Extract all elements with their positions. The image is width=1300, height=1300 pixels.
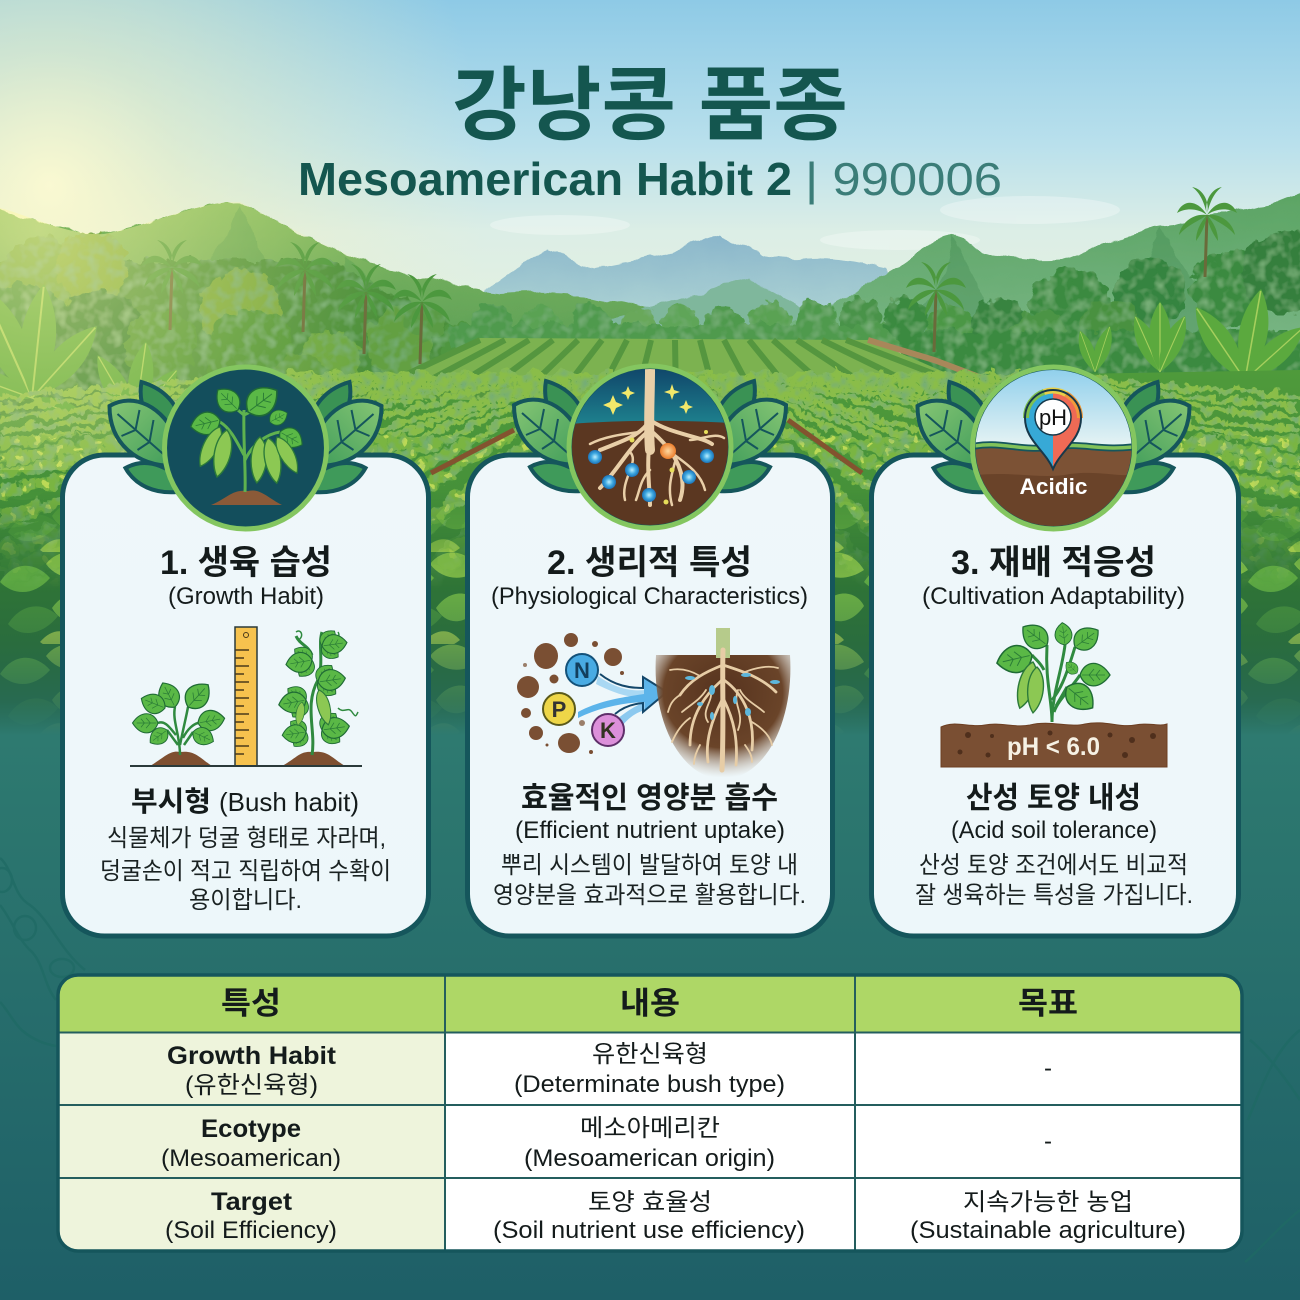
background: right trees xyxy=(883,230,1300,389)
big foreground leaves xyxy=(0,496,1300,726)
medallion: roots in soil xyxy=(514,366,786,530)
subheading: (Cultivation Adaptability) xyxy=(922,583,1185,610)
row: growth habit: (Determinate bush type) xyxy=(514,1071,785,1098)
background: palms xyxy=(142,187,1237,364)
right green mountain xyxy=(735,190,1300,345)
summary table xyxy=(58,975,1242,1252)
row: target: (Soil nutrient use efficiency) xyxy=(493,1217,805,1244)
subtitle: accession number: | 990006 xyxy=(805,153,1002,205)
row: ecotype: - xyxy=(1044,1128,1052,1155)
header labels: 내용 xyxy=(620,986,680,1021)
description xyxy=(915,852,1193,909)
background: dirt path xyxy=(868,340,982,378)
climbing plant xyxy=(275,624,358,766)
description: 뿌리 시스템이 발달하여 토양 내 xyxy=(501,852,798,879)
background: sun glow xyxy=(0,0,520,400)
header labels: 목표 xyxy=(1018,986,1078,1021)
arrow xyxy=(578,674,667,726)
description: 식물체가 덩굴 형태로 자라며, xyxy=(107,825,386,852)
background: sky xyxy=(0,0,1300,400)
medallion: soil pH xyxy=(918,367,1190,535)
medallion: bean plant xyxy=(110,367,382,529)
left mountain shading xyxy=(150,204,420,345)
background: teal fade xyxy=(0,520,1300,1300)
pH pin: pH xyxy=(1039,405,1067,430)
feature title: 효율적인 영양분 흡수 xyxy=(521,782,778,815)
heading: 1. 생육 습성 xyxy=(160,544,332,582)
description: 산성 토양 조건에서도 비교적 xyxy=(919,852,1188,879)
row: target xyxy=(165,1188,1186,1244)
root ball xyxy=(656,628,790,780)
ground line xyxy=(130,765,362,767)
description xyxy=(100,825,391,914)
middle hill xyxy=(600,277,870,345)
header labels xyxy=(221,986,1078,1021)
row: target: Target xyxy=(211,1188,293,1216)
background: foreground crop rows xyxy=(0,366,1300,726)
heading: 2. 생리적 특성 xyxy=(547,544,752,582)
description xyxy=(493,852,806,909)
medallion: soil pH: Acidic xyxy=(1020,474,1088,499)
icon: plant on acid soil xyxy=(941,618,1167,767)
feature title: 산성 토양 내성 xyxy=(966,782,1141,815)
row: growth habit xyxy=(167,1041,1052,1099)
row: growth habit: 유한신육형 xyxy=(592,1041,708,1068)
nutrient P xyxy=(543,693,575,725)
row: ecotype xyxy=(161,1115,1052,1172)
title: 강낭콩 품종 xyxy=(452,61,848,150)
header labels: 특성 xyxy=(221,986,281,1021)
description: 영양분을 효과적으로 활용합니다. xyxy=(493,882,806,909)
feature subtitle: (Efficient nutrient uptake) xyxy=(515,817,785,844)
distant blue mountains xyxy=(470,235,900,330)
left green mountain xyxy=(0,202,650,350)
background: clouds xyxy=(490,196,1120,250)
soil particles xyxy=(517,633,624,754)
background: distant striped field xyxy=(352,338,958,410)
dirt furrows xyxy=(431,420,862,473)
soil strip xyxy=(941,723,1167,767)
icon: NPK nutrients into roots xyxy=(517,628,790,780)
background: tree line xyxy=(450,297,910,348)
panel: growth habit xyxy=(62,367,428,936)
description: 덩굴손이 적고 직립하여 수확이 xyxy=(100,858,391,885)
bush plant xyxy=(132,677,226,766)
row: target: 지속가능한 농업 xyxy=(963,1189,1133,1216)
description: 용이합니다. xyxy=(189,887,302,914)
background: mountains xyxy=(0,190,1300,350)
description: 잘 생육하는 특성을 가집니다. xyxy=(915,882,1193,909)
nutrient N: N xyxy=(574,658,590,683)
panel: cultivation adaptability xyxy=(872,367,1238,936)
background: left trees xyxy=(0,232,482,440)
row: ecotype: (Mesoamerican) xyxy=(161,1145,341,1172)
soil strip: pH < 6.0 xyxy=(1007,733,1100,761)
nutrient K xyxy=(592,714,624,746)
feature subtitle: (Acid soil tolerance) xyxy=(951,817,1157,844)
background: warm light on foliage xyxy=(0,202,420,470)
ruler xyxy=(235,627,257,766)
nutrient P: P xyxy=(552,697,566,722)
subheading: (Physiological Characteristics) xyxy=(491,583,808,610)
row: ecotype: Ecotype xyxy=(201,1115,301,1143)
background: banana plants left xyxy=(0,278,108,430)
feature subtitle: (Bush habit) xyxy=(219,787,359,817)
row: growth habit: - xyxy=(1044,1055,1052,1082)
feature title: 부시형 xyxy=(131,786,211,817)
nutrient N xyxy=(566,654,598,686)
first column shading xyxy=(58,1032,445,1252)
soybean plant xyxy=(994,618,1110,722)
row: target: 토양 효율성 xyxy=(588,1189,712,1216)
row: target: (Sustainable agriculture) xyxy=(910,1217,1186,1244)
subheading: (Growth Habit) xyxy=(168,583,324,610)
panel: physiological characteristics xyxy=(468,366,832,936)
pH pin xyxy=(1025,390,1081,469)
row: ecotype: (Mesoamerican origin) xyxy=(524,1145,775,1172)
right mountain shading xyxy=(880,228,1230,345)
heading: 3. 재배 적응성 xyxy=(951,544,1156,582)
row: ecotype: 메소아메리칸 xyxy=(580,1115,720,1142)
decor: faint bean pods xyxy=(0,858,1300,1262)
nutrient K: K xyxy=(600,718,616,743)
table header row xyxy=(58,975,1242,1032)
row: growth habit: (유한신육형) xyxy=(185,1072,318,1099)
subtitle: variety name: Mesoamerican Habit 2 xyxy=(298,153,792,205)
icon: bush plant, ruler, climbing plant xyxy=(130,624,362,766)
row: growth habit: Growth Habit xyxy=(167,1042,337,1070)
row: target: (Soil Efficiency) xyxy=(165,1217,337,1244)
